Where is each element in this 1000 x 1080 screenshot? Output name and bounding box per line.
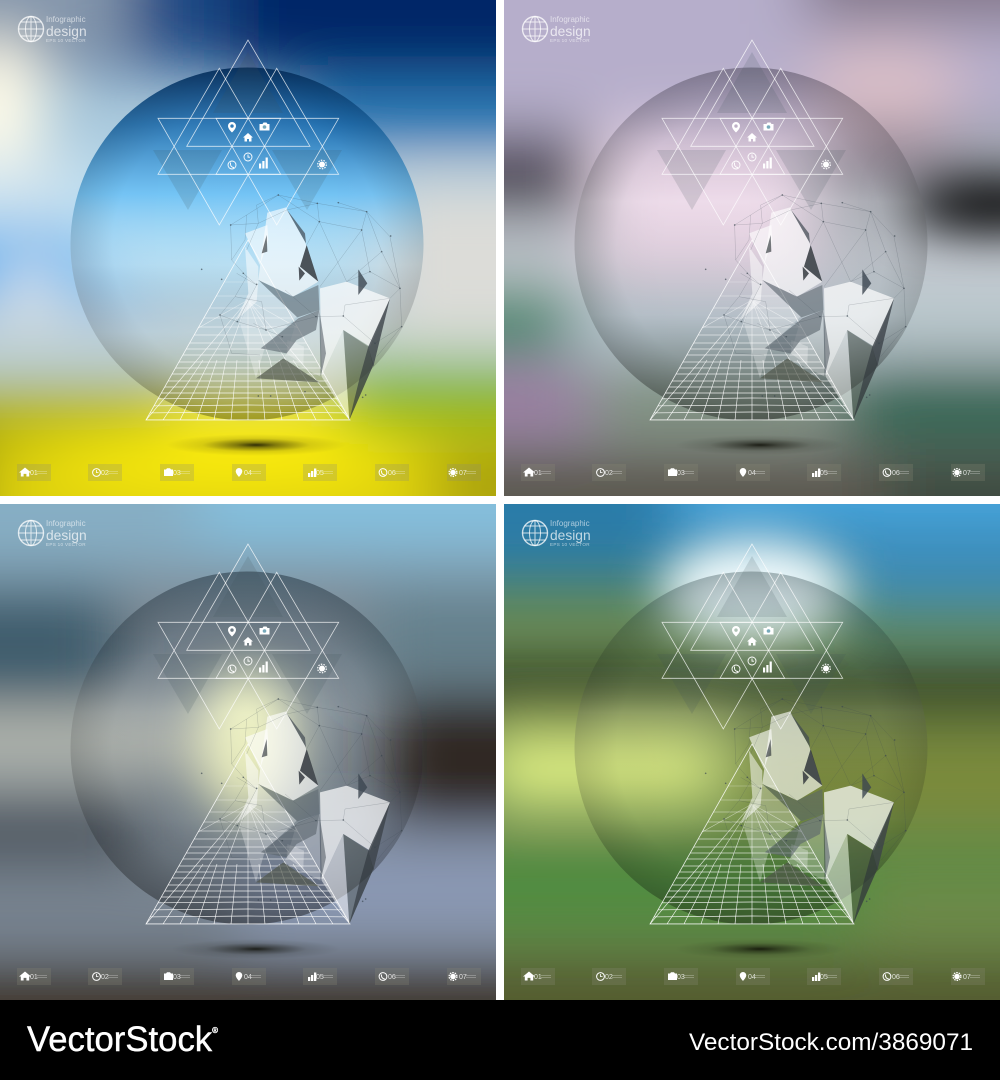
ground shadow [190, 941, 324, 957]
center glow [198, 666, 298, 822]
bottom navigation chips: 05 [820, 470, 828, 477]
bottom navigation chips: 07 [459, 974, 467, 981]
globe sphere [574, 572, 928, 924]
globe sphere [574, 68, 928, 420]
bottom navigation chips: 01 [534, 974, 542, 981]
blurred background [504, 0, 1000, 496]
bottom navigation chips: 06 [892, 470, 900, 477]
logo: EPS 10 VECTOR [46, 38, 86, 43]
bottom navigation chips: 03 [173, 470, 181, 477]
low poly mountain [705, 194, 906, 420]
perspective grid triangle [649, 744, 855, 924]
logo: design [550, 528, 591, 543]
blurred background [0, 504, 496, 1000]
bottom navigation chips: 03 [677, 470, 685, 477]
panel: lilac and green landscape [504, 0, 1000, 496]
bottom navigation chips: 04 [748, 974, 756, 981]
low poly mountain [705, 698, 906, 924]
bottom navigation chips: 03 [173, 974, 181, 981]
triangles with icons [153, 40, 342, 225]
footer brand: VectorStock [27, 1020, 214, 1059]
globe sphere [70, 572, 424, 924]
logo: Infographic [550, 15, 590, 24]
bottom navigation chips: 04 [244, 974, 252, 981]
ground shadow [177, 436, 334, 454]
panel: blue and yellow landscape [0, 0, 496, 496]
bottom navigation chips: 06 [892, 974, 900, 981]
low poly mountain [201, 194, 402, 420]
bottom navigation chips [17, 968, 481, 985]
footer brand: ® [212, 1026, 218, 1035]
bottom navigation chips: 03 [677, 974, 685, 981]
bottom navigation chips: 07 [459, 470, 467, 477]
logo [522, 519, 591, 547]
bottom navigation chips: 06 [388, 974, 396, 981]
logo [18, 519, 87, 547]
blurred background [0, 0, 496, 496]
triangles with icons [657, 544, 846, 729]
panel: grey-blue and brown landscape [0, 504, 496, 1000]
bottom navigation chips: 05 [820, 974, 828, 981]
perspective grid triangle [145, 240, 351, 420]
logo: design [46, 24, 87, 39]
ground shadow [695, 437, 824, 452]
logo [522, 15, 591, 43]
footer bar [0, 1000, 1000, 1080]
bottom navigation chips: 07 [963, 470, 971, 477]
logo: design [46, 528, 87, 543]
bottom navigation chips: 07 [963, 974, 971, 981]
logo: Infographic [46, 15, 86, 24]
perspective grid triangle [145, 744, 351, 924]
bottom navigation chips [521, 464, 985, 481]
bottom navigation chips: 01 [30, 974, 38, 981]
bottom navigation chips: 02 [605, 470, 613, 477]
logo: EPS 10 VECTOR [46, 542, 86, 547]
bottom navigation chips: 02 [101, 470, 109, 477]
triangles with icons [153, 544, 342, 729]
dark band at right edge [909, 179, 1000, 231]
top center glow [659, 537, 849, 641]
bottom navigation chips: 05 [316, 470, 324, 477]
logo: EPS 10 VECTOR [550, 542, 590, 547]
footer url: VectorStock.com/3869071 [689, 1029, 973, 1056]
bottom navigation chips: 04 [244, 470, 252, 477]
blurred background [504, 504, 1000, 1000]
panel: blue sky and green field landscape [504, 504, 1000, 1000]
logo: EPS 10 VECTOR [550, 38, 590, 43]
bottom navigation chips [17, 464, 481, 481]
bottom navigation chips: 02 [605, 974, 613, 981]
globe sphere [70, 68, 424, 420]
ground shadow [696, 942, 824, 956]
bottom navigation chips: 01 [30, 470, 38, 477]
perspective grid triangle [649, 240, 855, 420]
bottom navigation chips: 04 [748, 470, 756, 477]
logo: Infographic [46, 519, 86, 528]
logo [18, 15, 87, 43]
bottom navigation chips: 05 [316, 974, 324, 981]
logo: Infographic [550, 519, 590, 528]
logo: design [550, 24, 591, 39]
bottom navigation chips: 02 [101, 974, 109, 981]
triangles with icons [657, 40, 846, 225]
bottom navigation chips: 01 [534, 470, 542, 477]
bottom navigation chips: 06 [388, 470, 396, 477]
low poly mountain [201, 698, 402, 924]
bottom navigation chips [521, 968, 985, 985]
